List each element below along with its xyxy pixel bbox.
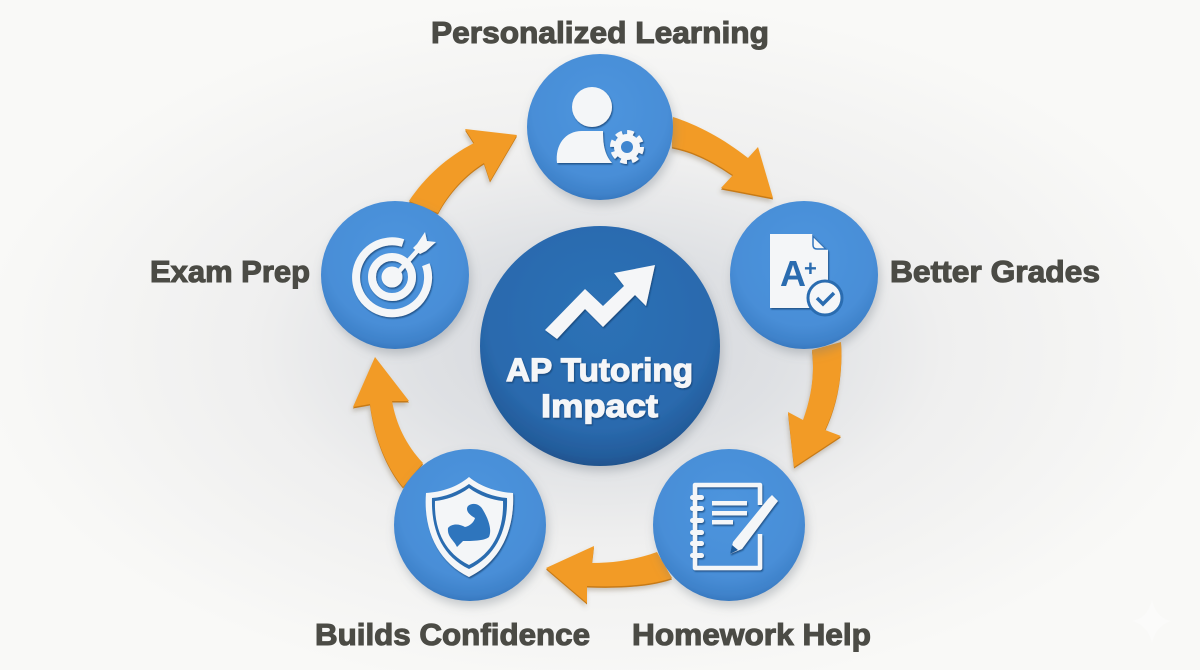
node: homework help [653,449,805,601]
icon: sparkle watermark [1132,600,1171,643]
label: Personalized Learning: Personalized Learning [431,15,769,50]
arrow: builds confidence to exam prep [353,357,423,487]
node: better grades [730,201,878,349]
icon: target with arrow [356,232,436,313]
icon: graded paper with check: A [780,253,806,294]
node: builds confidence [394,449,546,601]
icon: graded paper with check: + [804,256,817,281]
icon: notebook and pencil [690,485,778,568]
icon: graded paper with check [770,234,842,315]
center title [506,352,693,424]
center title: AP Tutoring [506,352,693,388]
node: personalized learning [527,54,673,200]
label: Homework Help: Homework Help [632,617,871,652]
center node: AP Tutoring Impact [480,226,720,466]
icon: upward trend arrow [545,265,655,339]
arrow: homework help to builds confidence [546,546,672,603]
label: Better Grades: Better Grades [890,254,1100,289]
icon: person with gear [557,87,642,163]
node: exam prep [321,201,469,349]
icon: shield with muscle [426,477,513,577]
center title: Impact [541,388,658,424]
arrow: exam prep to personalized learning [409,129,517,213]
label: Builds Confidence: Builds Confidence [315,617,590,652]
arrow: personalized learning to better grades [672,117,773,198]
label: Exam Prep: Exam Prep [150,254,310,289]
arrow: better grades to homework help [788,342,841,467]
